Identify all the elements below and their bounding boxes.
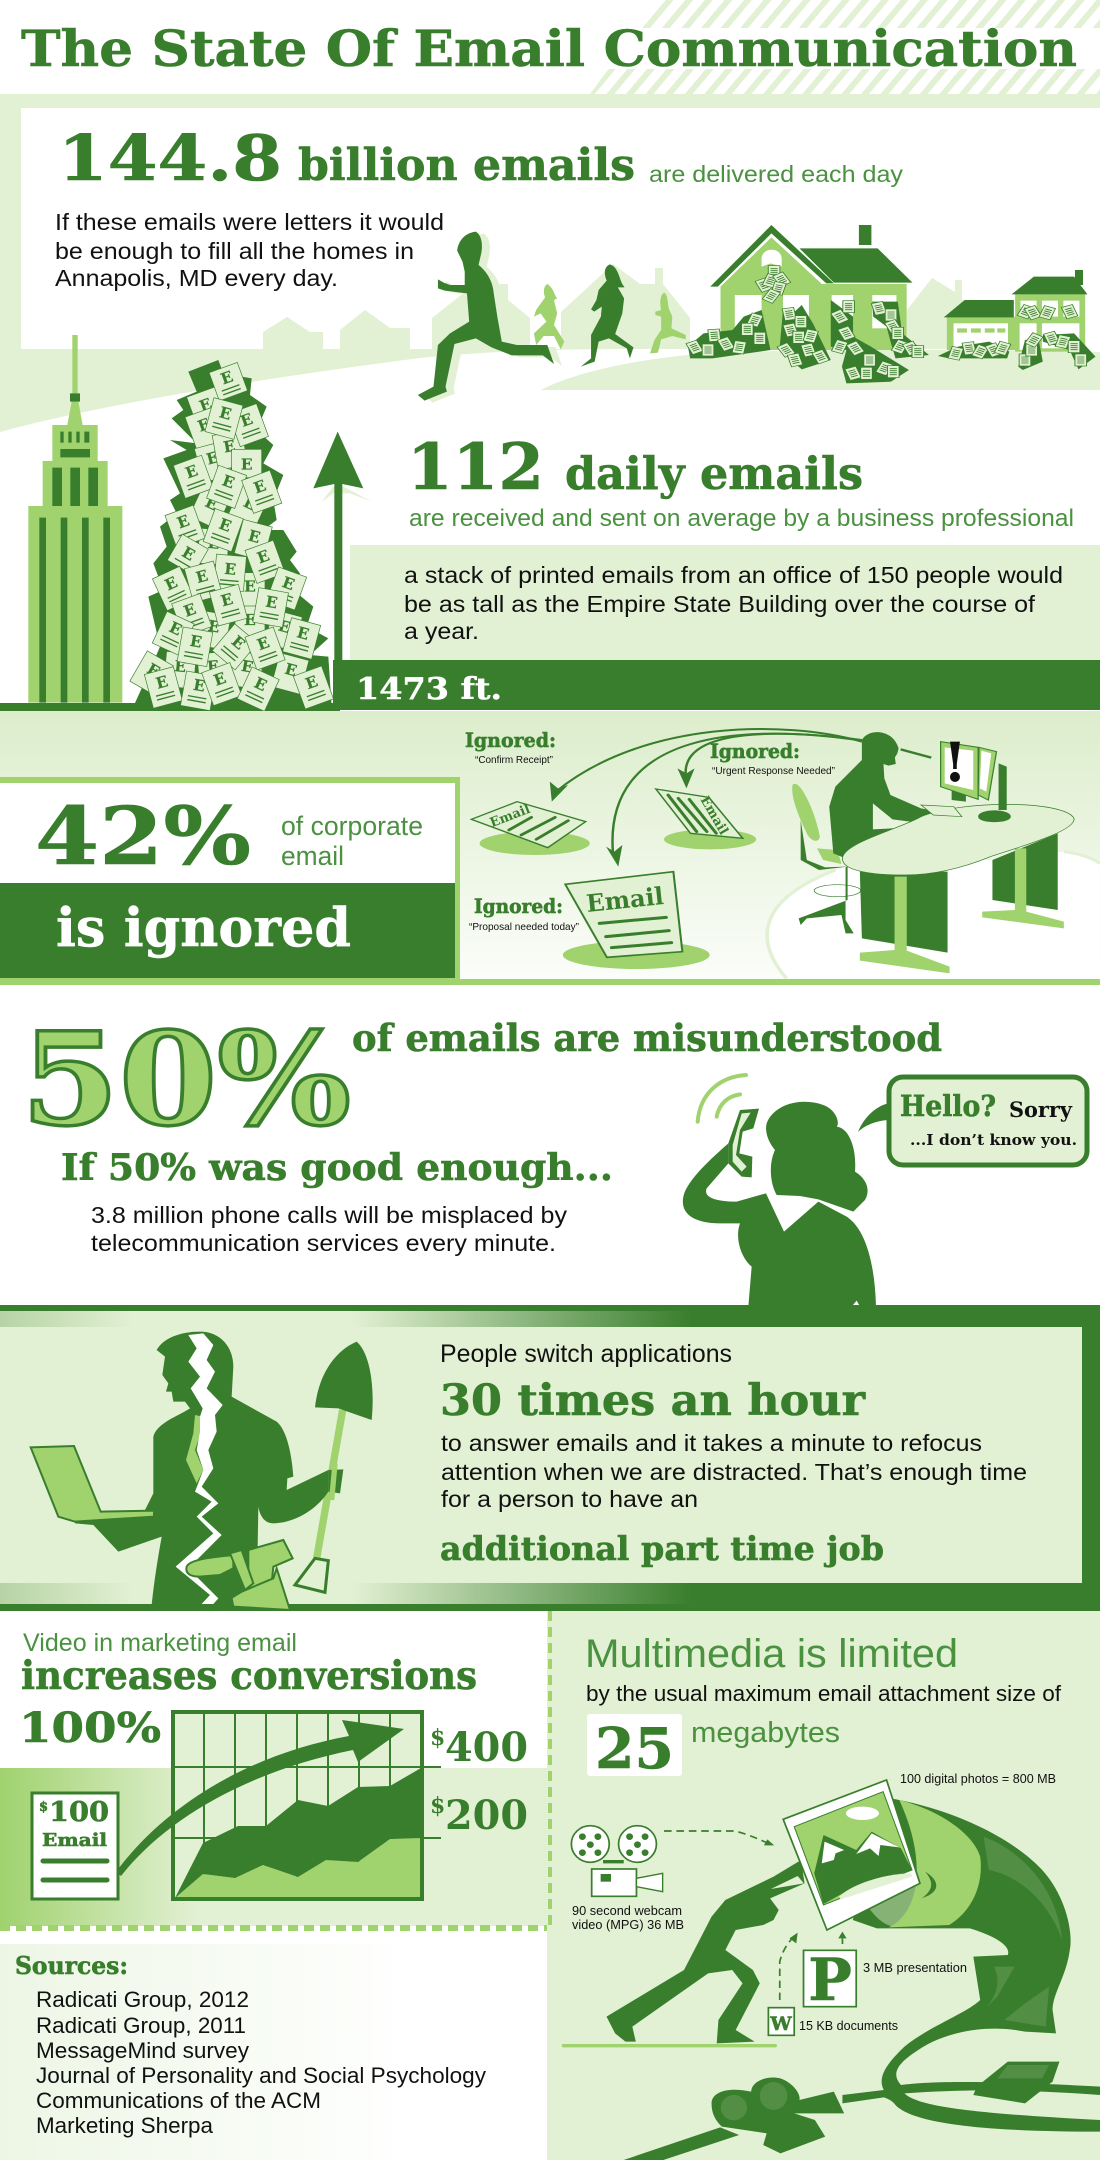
illustration: stack of printed emails: E: [219, 590, 235, 610]
man silhouette: [75, 1332, 328, 1605]
video in marketing email: Video in marketing email: [23, 1629, 297, 1657]
text block: stack of printed emails: a stack of printed emails from an office of 150 people would: [404, 562, 1063, 588]
person pushing: [606, 1860, 805, 2043]
illustration: stack of printed emails: E: [241, 493, 259, 514]
text block: stack of printed emails: a year.: [404, 618, 479, 644]
office chair: [792, 784, 861, 933]
pale runner right: [650, 293, 686, 353]
text block: refocus: to answer emails and it takes a minute to refocus: [441, 1430, 982, 1456]
is ignored: is ignored: [56, 897, 351, 959]
illustration: woman on the phone: [683, 1075, 876, 1307]
illustration: stack of printed emails: E: [244, 611, 256, 629]
small pale runner: [534, 284, 564, 349]
I don't know you: ...I don’t know you.: [910, 1131, 1077, 1149]
ignored callout: urgent response: “Urgent Response Needed”: [712, 765, 835, 777]
label: webcam video: video (MPG) 36 MB: [572, 1917, 684, 1932]
illustration: stack of printed emails: E: [207, 617, 221, 637]
panel: section one background: [0, 94, 1100, 440]
illustration: stack of printed emails: E: [280, 573, 297, 594]
laptop: [31, 1446, 154, 1522]
document three: [565, 872, 682, 957]
illustration: stack of printed emails: E: [179, 543, 198, 564]
panel: sources background: [0, 1944, 547, 2160]
illustration: stack of printed emails: E: [204, 448, 220, 469]
medium runner: [581, 264, 633, 367]
floor ellipse: [767, 852, 1100, 978]
sources list: Marketing Sherpa: [36, 2113, 214, 2138]
$200 value: 200: [445, 1792, 528, 1839]
sources list: Radicati Group, 2012: [36, 1987, 249, 2012]
signal arcs: [698, 1075, 746, 1122]
film camera: [571, 1826, 663, 1896]
panel: application switching: [0, 1305, 1100, 1611]
text block: people switch applications: People switch applications: [440, 1340, 732, 1368]
text block: stack of printed emails: [404, 562, 1063, 644]
illustration: stack of printed emails: E: [218, 367, 236, 388]
illustration: stack of printed emails: E: [303, 672, 320, 693]
illustration: stack of printed emails: E: [244, 578, 256, 596]
100%: 100%: [19, 1704, 161, 1752]
text block: phone calls: [91, 1202, 568, 1256]
50% stat: 50%: [21, 1005, 351, 1155]
shovel blade: [315, 1342, 373, 1420]
chart: rising conversions: [116, 1712, 441, 1899]
144.8 stat: 144.8: [58, 121, 282, 195]
sources list: MessageMind survey: [36, 2038, 249, 2063]
illustration: stack of printed emails: E: [192, 676, 207, 696]
illustration: stack of printed emails: E: [224, 560, 237, 579]
42% stat: 42%: [35, 789, 251, 883]
label: digital photos: 100 digital photos = 800 MB: [900, 1771, 1056, 1786]
body: [683, 1143, 876, 1307]
illustration: stack of printed emails: E: [189, 632, 203, 652]
$200 value: $: [430, 1793, 445, 1819]
illustration: stack of printed emails: E: [251, 674, 270, 695]
decorative stripes header: [500, 0, 1100, 94]
hand grip: [328, 1469, 343, 1493]
big house: [688, 225, 929, 383]
desk legs: [860, 833, 1064, 973]
illustration: stack of printed emails: E: [216, 515, 234, 536]
background house silhouettes: [263, 264, 985, 349]
shovel handle: [317, 1410, 343, 1558]
text block: letters: [55, 209, 444, 291]
P box: [804, 1950, 856, 2007]
document shadows: [480, 829, 756, 969]
speech bubble: [858, 1077, 1087, 1165]
illustration: stack of printed emails: E: [228, 632, 248, 653]
illustration: stack of printed emails: E: [183, 462, 200, 482]
monitor with exclamation: [921, 742, 1011, 822]
title: The State Of Email Communication: [21, 19, 1077, 78]
illustration: stack of printed emails: E: [174, 657, 187, 676]
illustration: stack of printed emails: E: [162, 573, 180, 594]
ignored arrows: [556, 729, 862, 853]
illustration: stack of printed emails: E: [197, 395, 214, 416]
illustration: stack of printed emails: E: [202, 493, 221, 514]
increases conversions: increases conversions: [21, 1653, 477, 1699]
sources heading: Sources:: [15, 1951, 128, 1980]
illustration: stack of printed emails: E: [175, 512, 192, 532]
illustration: stack of printed emails: E: [283, 660, 299, 680]
dashed arrows: [664, 1831, 842, 2000]
W box: [768, 2008, 794, 2035]
of corporate email: email: [281, 841, 344, 871]
25 box: 25: [595, 1716, 674, 1782]
scattered email papers: [686, 266, 1087, 380]
illustration: stack of printed emails: E: [194, 567, 210, 587]
daily emails: daily emails: [565, 447, 863, 500]
$400 value: $: [430, 1725, 445, 1751]
email labels on documents: [488, 794, 731, 918]
illustration: stack of printed emails: E: [144, 660, 163, 681]
illustration: Empire State Building: [28, 335, 122, 703]
ignored callout: proposal needed: [469, 894, 579, 933]
ignored callout: urgent response: Ignored:: [710, 739, 800, 763]
illustration: stack of printed emails: E: [295, 623, 311, 644]
illustration: hose, person pushing and photo: [562, 1780, 1100, 2160]
panel: video conversion band: [0, 1768, 547, 1926]
telephone: [728, 1109, 759, 1177]
big runner: [418, 232, 554, 401]
1473 ft label: 1473 ft.: [356, 672, 502, 707]
funnel mouth: [889, 1800, 981, 1927]
multimedia heading: Multimedia is limited: [585, 1632, 958, 1676]
panel: 42 percent box: [0, 777, 460, 980]
text block: letters: Annapolis, MD every day.: [55, 265, 338, 291]
P letter: P: [808, 1946, 852, 2014]
growth arrow: [116, 1720, 404, 1876]
illustration: stack of printed emails: E: [181, 600, 199, 621]
business professional text: are received and sent on average by a business professional: [409, 505, 1074, 532]
illustration: man split between laptop and shovel: [31, 1332, 373, 1610]
document one: [471, 802, 586, 848]
sources list: Communications of the ACM: [36, 2088, 321, 2113]
shovel grip: [295, 1558, 328, 1592]
illustration: stack of printed emails: E: [166, 618, 185, 639]
illustration: stack of printed emails: E: [207, 534, 220, 553]
label: documents: 15 KB documents: [799, 2018, 898, 2033]
illustration: stack of printed emails: E: [206, 657, 220, 676]
light silhouette runner shadow: [426, 234, 562, 403]
tool belt: [186, 1540, 293, 1610]
text block: refocus: for a person to have an: [441, 1486, 698, 1512]
ground bar: [562, 2044, 777, 2047]
email card: $: [39, 1800, 48, 1815]
megabytes: megabytes: [691, 1717, 840, 1749]
photo picture: [794, 1792, 912, 1905]
text block: letters: be enough to fill all the homes in: [55, 238, 414, 264]
ignored callout: urgent response: [710, 739, 835, 777]
ignored callout: confirm receipt: Ignored:: [465, 728, 556, 752]
of corporate email: [281, 811, 423, 871]
illustration: stack of printed emails: E: [195, 415, 212, 436]
plug cable fins: [973, 2062, 1059, 2103]
email card: [32, 1793, 118, 1899]
ignored callout: proposal needed: Ignored:: [474, 894, 563, 918]
sources list: [36, 1987, 486, 2138]
illustration: runners and houses: [418, 225, 1095, 403]
illustration: stack of printed emails: E: [154, 672, 170, 693]
text block: refocus: [441, 1430, 1027, 1512]
illustration: stack of printed emails: [130, 360, 333, 711]
arrow: height of the stack: [313, 432, 372, 660]
email card: 100: [49, 1797, 109, 1828]
if 50% was good enough: If 50% was good enough...: [61, 1147, 613, 1189]
illustration: stack of printed emails: E: [276, 617, 292, 637]
ignored callout: proposal needed: “Proposal needed today”: [469, 921, 579, 933]
email labels on documents: Email: [488, 802, 533, 831]
illustration: stack of printed emails: E: [222, 437, 237, 457]
sources list: Radicati Group, 2011: [36, 2013, 246, 2038]
are delivered each day: are delivered each day: [649, 161, 904, 187]
of corporate email: of corporate: [281, 811, 423, 841]
Sorry: Sorry: [1009, 1097, 1073, 1122]
illustration: stack of printed emails: E: [238, 410, 255, 431]
illustration: stack of printed emails: E: [251, 477, 269, 497]
illustration: stack of printed emails: E: [211, 669, 229, 690]
ignored callout: confirm receipt: [465, 728, 556, 766]
illustration: stack of printed emails: E: [264, 593, 279, 612]
label: webcam video: [572, 1903, 684, 1932]
illustration: stack of printed emails: E: [241, 455, 253, 473]
document two: [656, 789, 743, 838]
desk top: [842, 804, 1074, 875]
gaze line: [901, 749, 931, 758]
label: webcam video: 90 second webcam: [572, 1903, 682, 1918]
sources list: Journal of Personality and Social Psychology: [36, 2063, 486, 2088]
small house: [938, 270, 1095, 370]
$400 value: 400: [445, 1724, 528, 1771]
plug: [712, 2077, 844, 2153]
green hose and cable: [842, 1798, 1100, 2132]
additional part time job: additional part time job: [440, 1529, 884, 1568]
30 times an hour: 30 times an hour: [440, 1376, 866, 1426]
person silhouette: [829, 732, 966, 858]
jagged split: [176, 1333, 223, 1604]
panel: 112 light box and dark band: [0, 545, 1100, 711]
panel: multimedia background: [547, 1611, 1100, 2160]
illustration: stack of printed emails: E: [220, 472, 237, 492]
Hello?: Hello?: [900, 1089, 996, 1123]
illustration: stack of printed emails: E: [246, 527, 262, 547]
illustration: stack of printed emails: E: [255, 633, 272, 654]
label: presentation: 3 MB presentation: [863, 1960, 967, 1975]
hair: [766, 1102, 868, 1212]
mountains: [814, 1832, 912, 1904]
text block: phone calls: telecommunication services every minute.: [91, 1230, 556, 1256]
text block: letters: If these emails were letters it would: [55, 209, 444, 235]
illustration: stack of printed emails: E: [255, 547, 272, 567]
112 stat: 112: [407, 430, 544, 505]
text block: phone calls: 3.8 million phone calls will be misplaced by: [91, 1202, 568, 1228]
attachment size text: by the usual maximum email attachment size of: [586, 1681, 1062, 1706]
panel: ignored emails background: [0, 711, 1100, 985]
photo frame: [783, 1780, 920, 1930]
illustration: person ignoring emails at desk: [471, 729, 1100, 978]
hose highlights: [984, 1837, 1062, 2027]
tie: [186, 1415, 203, 1483]
illustration: stack of printed emails: E: [240, 657, 255, 677]
of emails are misunderstood: of emails are misunderstood: [352, 1016, 942, 1060]
email labels on documents: Email: [585, 881, 665, 918]
email labels on documents: Email: [697, 794, 731, 838]
W letter: W: [769, 2013, 792, 2035]
text block: refocus: attention when we are distracted. That’s enough time: [441, 1459, 1027, 1485]
illustration: stack of printed emails: E: [217, 403, 233, 424]
billion emails: billion emails: [298, 140, 635, 191]
text block: stack of printed emails: be as tall as the Empire State Building over the course of: [404, 591, 1036, 617]
ignored callout: confirm receipt: “Confirm Receipt”: [475, 754, 553, 766]
funnel interior: [832, 1786, 929, 1934]
email card: Email: [42, 1830, 107, 1851]
exclamation mark: !: [943, 730, 967, 794]
